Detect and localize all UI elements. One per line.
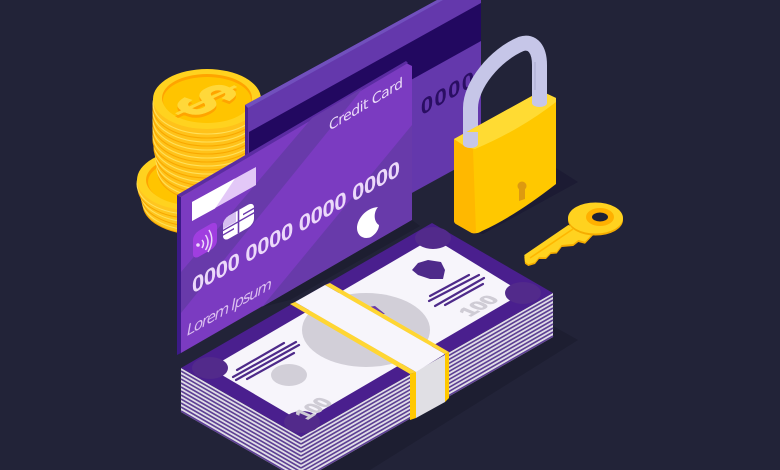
shield emblem	[412, 260, 445, 279]
denomination left: 100	[289, 395, 339, 422]
banknote white face	[210, 238, 523, 422]
icon: contactless badge	[193, 220, 217, 260]
denomination right: 100	[454, 293, 505, 319]
keyhole	[518, 182, 526, 201]
icon: padlock	[454, 43, 556, 233]
banknote corner circles	[192, 227, 541, 433]
card diagonal shading	[181, 88, 363, 313]
right text lines	[429, 275, 484, 306]
card title: Credit Card	[329, 74, 403, 135]
lower coin stack	[137, 150, 249, 234]
icon: card logo	[357, 207, 379, 238]
back card number: 0000 0000	[359, 67, 474, 157]
top coin face: $	[154, 74, 258, 126]
stack right side	[301, 293, 553, 470]
front of credit card	[177, 61, 412, 355]
shackle front legs	[463, 90, 547, 148]
signature panel	[192, 167, 256, 221]
back of credit card	[245, 0, 481, 290]
lock top bevel	[454, 91, 556, 149]
shadow under money stack	[320, 326, 578, 470]
portrait purple accent	[368, 306, 385, 314]
magnetic stripe	[249, 3, 481, 170]
portrait ellipse	[302, 293, 430, 367]
stack left side	[181, 368, 301, 470]
icon: chip	[223, 201, 254, 242]
money stack	[181, 223, 553, 470]
shadow of card on money stack	[262, 220, 420, 307]
icon: gold coin stacks	[137, 69, 266, 234]
lock body	[454, 91, 556, 233]
icon: key	[524, 202, 623, 266]
shackle	[470, 43, 540, 143]
paper band	[290, 283, 449, 420]
cardholder name: Lorem Ipsum	[187, 274, 272, 340]
small seal ellipse	[271, 364, 307, 386]
top coin face: $	[154, 77, 258, 129]
shadow of padlock	[470, 168, 578, 234]
lock left side	[454, 139, 476, 233]
upper coin stack	[153, 74, 266, 202]
left text lines	[233, 342, 299, 380]
card number: 0000 0000 0000 0000	[192, 156, 400, 300]
banknote purple border	[181, 223, 553, 437]
